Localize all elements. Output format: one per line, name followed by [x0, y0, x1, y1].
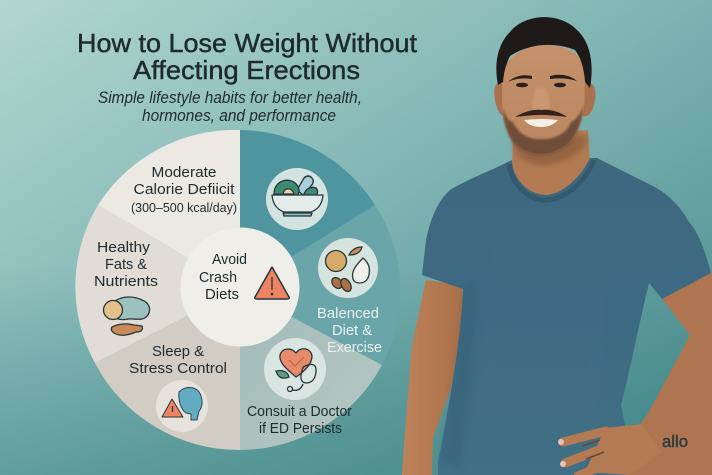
right arm: [622, 272, 712, 475]
shirt collar: [509, 160, 594, 200]
shirt highlight: [470, 240, 610, 430]
wheel chart: [75, 130, 400, 450]
segment: consult a doctor: [240, 289, 382, 450]
icon: salad bowl: [266, 168, 328, 230]
eyes: [516, 83, 566, 87]
center circle: [180, 228, 300, 346]
label: sleep and stress: Stress Control: [129, 361, 227, 377]
label: avoid crash diets: [199, 252, 247, 303]
face: [502, 45, 585, 155]
label: healthy fats: [94, 240, 158, 290]
t-shirt: [422, 158, 711, 475]
left arm: [402, 280, 464, 475]
label: moderate calorie deficit: [131, 165, 237, 215]
subtitle: [98, 89, 362, 125]
segment: sleep and stress: [95, 289, 240, 450]
icon: heart and stethoscope: [264, 338, 326, 400]
logo: allo: [662, 432, 688, 451]
label: sleep and stress: [129, 344, 227, 377]
segment: moderate calorie deficit: [98, 130, 240, 289]
icon: sweet potato and almonds: [104, 297, 150, 335]
segment: healthy fats: [75, 205, 240, 363]
label: balanced diet: [317, 306, 382, 356]
moustache: [515, 110, 567, 117]
eyebrows: [508, 75, 577, 82]
subtitle: hormones, and performance: [142, 107, 336, 125]
label: avoid crash diets: Diets: [205, 287, 239, 303]
label: consult a doctor: Consuit a Doctor: [247, 404, 352, 420]
shirt shading: [440, 280, 474, 470]
icon: head with warning: [156, 380, 208, 432]
icon: nuts and seeds: [318, 238, 378, 298]
subtitle: Simple lifestyle habits for better health,: [98, 89, 362, 107]
smile: [524, 119, 558, 127]
label: healthy fats: Nutrients: [94, 274, 158, 290]
segment: bowl: [240, 130, 375, 289]
label: balanced diet: Exercise: [327, 340, 382, 356]
neck: [511, 130, 592, 200]
label: moderate calorie deficit: Calorie Defiicit: [134, 182, 234, 198]
icon: warning triangle: [255, 267, 289, 299]
neck shadow: [514, 135, 586, 165]
beard: [503, 104, 584, 155]
label: healthy fats: Fats &: [105, 257, 147, 273]
label: sleep and stress: Sleep &: [152, 344, 204, 360]
hair: [496, 17, 592, 88]
label: avoid crash diets: Avoid: [212, 252, 247, 268]
label: avoid crash diets: Crash: [199, 270, 237, 286]
ears: [494, 83, 595, 116]
label: healthy fats: Healthy: [97, 240, 151, 256]
label: consult a doctor: if ED Persists: [259, 421, 342, 437]
title: How to Lose Weight Without: [77, 28, 418, 58]
person: [402, 17, 712, 475]
label: moderate calorie deficit: Moderate: [152, 165, 216, 181]
label: balanced diet: Diet &: [332, 323, 372, 339]
title: [77, 28, 418, 85]
label: consult a doctor: [247, 404, 352, 437]
label: balanced diet: Balenced: [317, 306, 379, 322]
hand: [558, 424, 662, 475]
label: moderate calorie deficit: (300–500 kcal/day): [131, 200, 237, 215]
segment: balanced diet: [240, 205, 400, 365]
nose: [532, 88, 550, 112]
title: Affecting Erections: [133, 55, 360, 85]
